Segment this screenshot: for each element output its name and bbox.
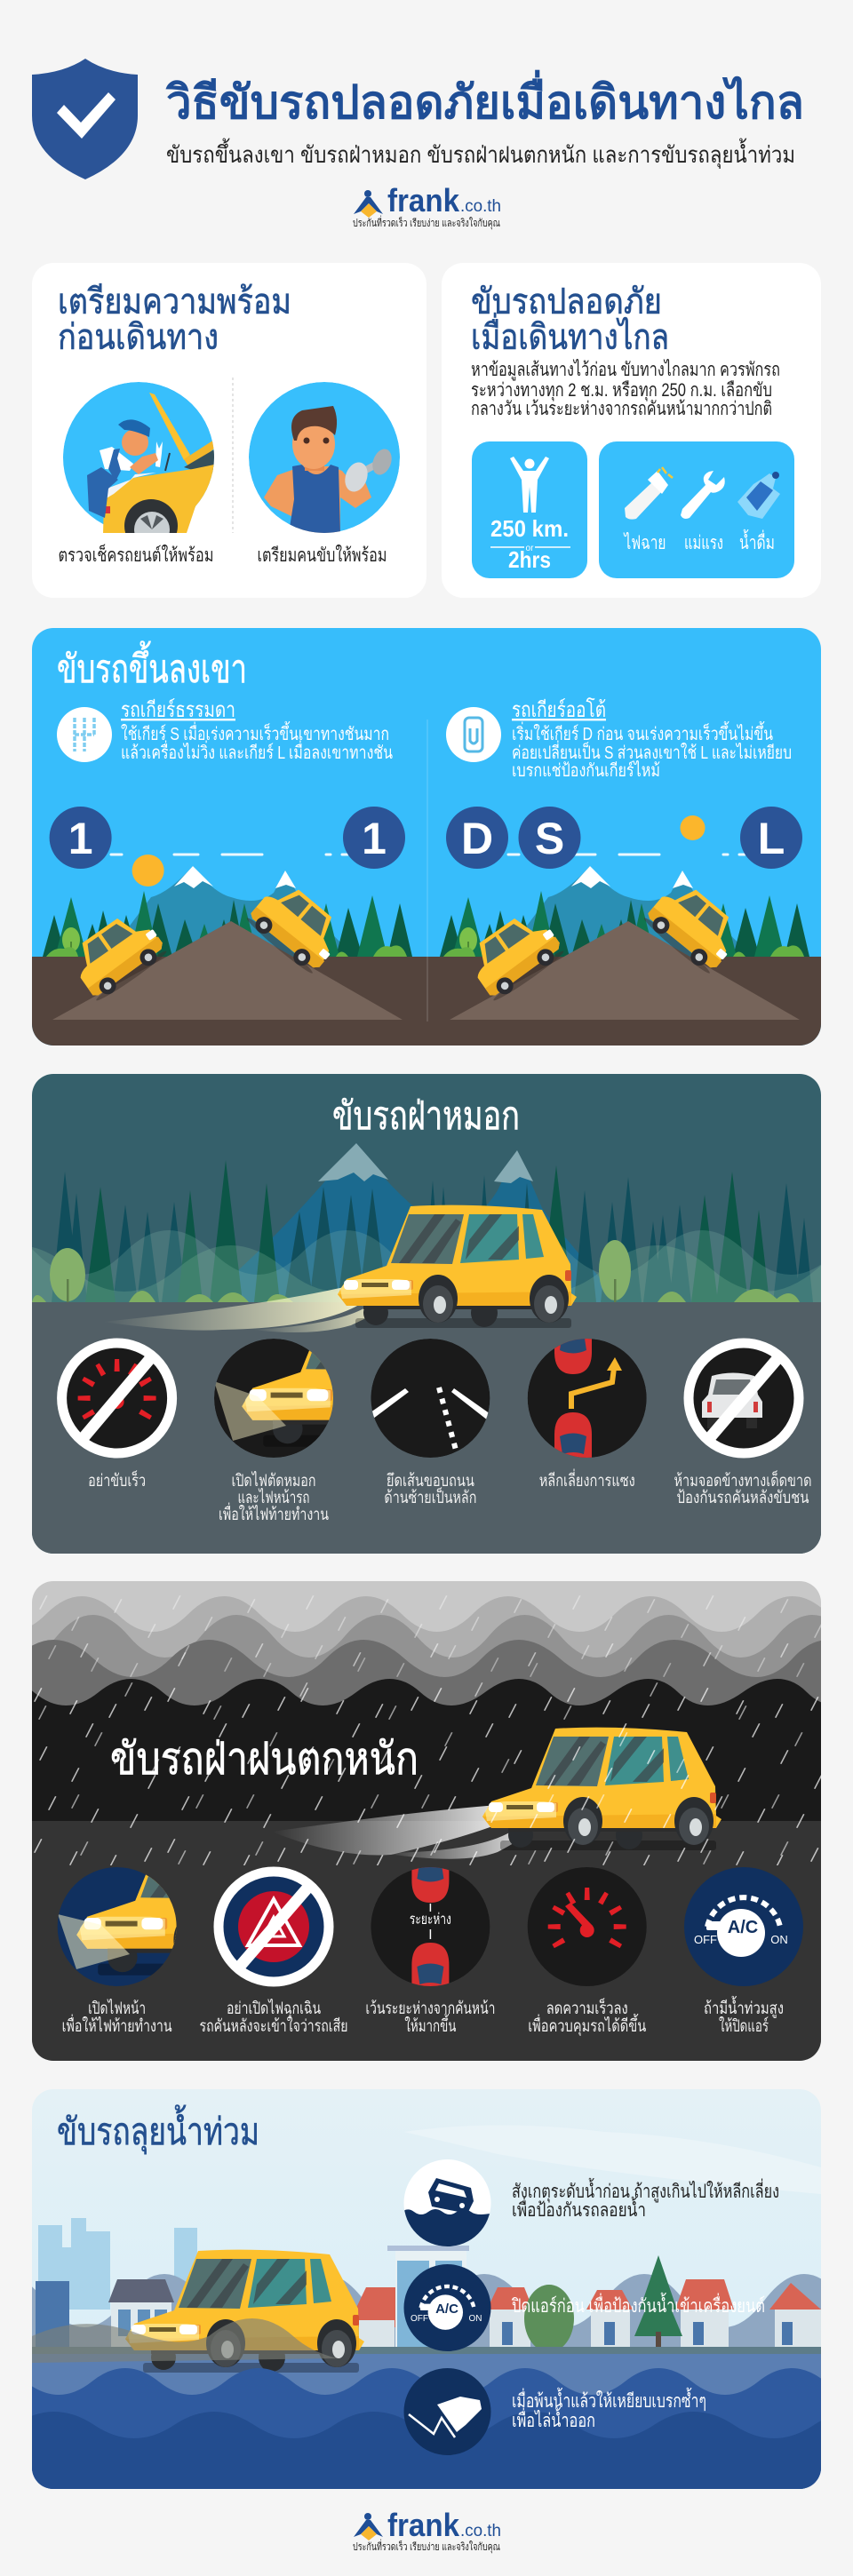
headlight beams (272, 1805, 533, 1859)
text: check water level (512, 2178, 779, 2221)
label: follow road edge (385, 1472, 476, 1503)
scene: city skyline (38, 2218, 197, 2310)
scene: houses (36, 2279, 821, 2352)
panel: driving in heavy rain (0, 1581, 853, 2061)
panel: driving uphill and downhill (32, 628, 821, 1046)
label: prepare driver: เตรียมคนขับให้พร้อม (258, 545, 387, 566)
icon: air conditioner off: A/C (435, 2302, 458, 2317)
icon: left sun (132, 855, 164, 886)
icon: flashlight (625, 467, 673, 520)
gear badge: S: S (535, 814, 564, 863)
text: automatic transmission: เริ่มใช้เกียร์ D ก่อน จนเร่งความเร็วขึ้นไม่ขึ้น (512, 721, 773, 744)
logo: frank top: frank (387, 182, 460, 219)
divider (232, 378, 234, 533)
illustration: fit driver with dumbbell (249, 382, 400, 533)
car (338, 1205, 577, 1328)
panel: safe driving long distance (442, 263, 821, 598)
icon: automatic shifter (446, 707, 501, 762)
ground (32, 1821, 821, 2061)
gear badge: L (740, 807, 802, 869)
logo: frank bottom (353, 2507, 501, 2554)
icon: no roadside stopping (689, 1343, 799, 1453)
scene: hills (0, 2274, 853, 2363)
gear badge: L: L (758, 814, 785, 863)
logo: frank bottom: ประกันที่รวดเร็ว เรียบง่าย และจริงใจกับคุณ (353, 2539, 500, 2554)
card: rest every 250 km: or (526, 544, 534, 553)
icon: air conditioner off: OFF (411, 2314, 428, 2324)
icon: keep distance (371, 1842, 490, 2003)
scene: pine forest (52, 1160, 813, 1302)
body text: กลางวัน เว้นระยะห่างจากรถคันหน้ามากกว่าปกติ (471, 399, 772, 419)
water: first wave (0, 2368, 853, 2489)
text: pump brakes (512, 2388, 706, 2431)
heading: safe driving (471, 282, 669, 357)
icon: no hazard lights (219, 1872, 329, 1982)
scene: central building (387, 2246, 469, 2350)
card: emergency items (599, 441, 794, 578)
heading: flood: ขับรถลุยน้ำท่วม (57, 2104, 259, 2155)
icon: shield with check mark (32, 59, 138, 179)
water: translucent bump over car (32, 2318, 338, 2363)
label: avoid overtaking: หลีกเลี่ยงการแซง (539, 1468, 635, 1491)
label: no roadside stopping: ห้ามจอดข้างทางเด็ดขาด (674, 1469, 812, 1491)
label: air conditioner off: ให้ปิดแอร์ (719, 2016, 769, 2036)
label: follow road edge: ด้านซ้ายเป็นหลัก (384, 1486, 476, 1507)
text: manual transmission: แล้วเครื่องไม่วิ่ง และเกียร์ L เมื่อลงเขาทางชัน (121, 740, 393, 763)
text: pump brakes: เพื่อไล่น้ำออก (512, 2407, 595, 2431)
divider (426, 720, 428, 1022)
icon: reduce speed (528, 1867, 647, 1986)
gear badge: D (446, 807, 508, 869)
scene: trees (524, 2255, 682, 2352)
heading: safe driving: ขับรถปลอดภัย (471, 282, 662, 322)
heading: prepare: เตรียมความพร้อม (58, 282, 291, 322)
text: check water level: สังเกตุระดับน้ำก่อน ถ้าสูงเกินไปให้หลีกเลี่ยง (512, 2178, 779, 2203)
label: fog lights (219, 1471, 329, 1524)
heading: prepare: ก่อนเดินทาง (58, 318, 219, 357)
car (482, 1728, 721, 1850)
card: emergency items: ไฟฉาย (623, 532, 666, 553)
text: manual transmission: ใช้เกียร์ S เมื่อเร่งความเร็วขึ้นเขาทางชันมาก (121, 721, 389, 744)
icon: right sun (681, 815, 706, 840)
gear badge: 1 uphill: 1 (68, 814, 93, 863)
card: rest every 250 km (472, 441, 587, 578)
scene: small trees and bushes (32, 1240, 800, 1302)
label: reduce speed: ลดความเร็วลง (546, 1997, 628, 2018)
label: keep distance: เว้นระยะห่างจากคันหน้า (365, 2000, 495, 2018)
panel: driving through flood (0, 2089, 853, 2489)
label: fog lights: เปิดไฟตัดหมอก (231, 1471, 316, 1491)
scene: storm cloud layers (0, 1596, 853, 1830)
scene: fog layers (32, 1230, 821, 1302)
card: rest every 250 km: 250 km. (490, 515, 569, 542)
ground (32, 957, 821, 1046)
text: manual transmission (121, 697, 393, 763)
rain streaks: upper faint (32, 1590, 821, 1679)
icon: air conditioner off (403, 2264, 490, 2351)
card: rest every 250 km: 2hrs (508, 546, 551, 573)
gear badge: D: D (461, 814, 493, 863)
logo: frank bottom: .co.th (460, 2522, 501, 2540)
heading: heavy rain: ขับรถฝ่าฝนตกหนัก (110, 1734, 419, 1784)
text: check water level: เพื่อป้องกันรถลอยน้ำ (512, 2197, 646, 2221)
scene: left mountain road (43, 855, 412, 1020)
text: manual transmission: รถเกียร์ธรรมดา (121, 697, 235, 722)
gear badge: 1 downhill: 1 (362, 814, 387, 863)
label: no hazard lights: รถคันหลังจะเข้าใจว่ารถเสีย (199, 2016, 348, 2036)
scene: right mountain road (440, 855, 809, 1020)
logo: frank top: ประกันที่รวดเร็ว เรียบง่าย และจริงใจกับคุณ (353, 215, 500, 230)
label: headlights on: เปิดไฟหน้า (88, 1999, 146, 2018)
label: no hazard lights (199, 1999, 348, 2036)
icon: avoid overtaking (528, 1339, 647, 1458)
scene: mountains (204, 1143, 622, 1302)
logo: frank bottom: frank (387, 2507, 460, 2543)
label: keep distance: ให้มากขึ้น (404, 2014, 456, 2036)
card: emergency items: น้ำดื่ม (739, 529, 775, 553)
text: automatic transmission: เบรกแช่ป้องกันเกียร์ไหม้ (512, 760, 660, 781)
icon: keep distance: ระยะห่าง (410, 1911, 451, 1928)
label: fog lights: เพื่อให้ไฟท้ายทำงาน (219, 1502, 329, 1524)
card: emergency items: แม่แรง (684, 533, 723, 553)
label: reduce speed: เพื่อควบคุมรถได้ดีขึ้น (528, 2014, 646, 2037)
icon: air conditioner off: OFF (694, 1933, 717, 1946)
car (125, 2250, 364, 2373)
label: keep distance (365, 2000, 495, 2036)
text: turn off air conditioner: ปิดแอร์ก่อน เพื่อป้องกันน้ำเข้าเครื่องยนต์ (511, 2293, 765, 2317)
text: automatic transmission (512, 697, 792, 781)
icon: air conditioner off: ON (469, 2314, 482, 2324)
icon: foot on brake (403, 2368, 490, 2455)
icon: air conditioner off (684, 1867, 803, 1986)
gear badge: 1 downhill (343, 807, 405, 869)
logo: frank top (353, 182, 501, 230)
ground (32, 1302, 821, 1554)
label: reduce speed (528, 1997, 646, 2037)
icon: water bottle (737, 472, 780, 519)
icon: car in water (400, 2159, 498, 2252)
logo: frank top: .co.th (460, 197, 501, 216)
gear badge: 1 uphill (50, 807, 112, 869)
label: fog lights: และไฟหน้ารถ (238, 1488, 309, 1507)
heading: uphill downhill: ขับรถขึ้นลงเขา (57, 640, 247, 691)
illustration: mechanic checking car (63, 382, 214, 533)
icon: air conditioner off: ON (770, 1933, 788, 1946)
panel: prepare before the trip (32, 263, 426, 598)
label: headlights on: เพื่อให้ไฟท้ายทำงาน (62, 2014, 172, 2036)
rain streaks: lower dense (32, 1626, 821, 1865)
label: no roadside stopping (674, 1470, 810, 1503)
scene: clouds (404, 2125, 821, 2194)
icon: headlights on (58, 1828, 363, 1986)
icon: wrench (681, 471, 725, 519)
heading: prepare (58, 282, 291, 357)
label: air conditioner off: ถ้ามีน้ำท่วมสูง (704, 1996, 784, 2018)
icon: no speeding (62, 1343, 172, 1453)
road (32, 2347, 821, 2356)
icon: manual shifter (57, 707, 112, 762)
label: air conditioner off (704, 1996, 784, 2036)
body text: ระหว่างทางทุก 2 ช.ม. หรือทุก 250 ก.ม. เลือกขับ (471, 380, 772, 402)
icon: fog lights (214, 1339, 333, 1458)
icon: air conditioner off: A/C (728, 1918, 758, 1937)
label: no hazard lights: อย่าเปิดไฟฉุกเฉิน (227, 1999, 321, 2019)
text: automatic transmission: รถเกียร์ออโต้ (512, 697, 606, 722)
panel: driving through fog (0, 1074, 853, 1554)
label: headlights on (62, 1999, 172, 2036)
gear badge: S (519, 807, 581, 869)
label: no speeding: อย่าขับเร็ว (88, 1469, 146, 1491)
heading: fog: ขับรถฝ่าหมอก (332, 1094, 520, 1138)
icon: follow road edge (371, 1339, 490, 1458)
headlight beams (116, 1288, 364, 1332)
label: check the car: ตรวจเช็ครถยนต์ให้พร้อม (59, 543, 213, 566)
label: no roadside stopping: ป้องกันรถคันหลังขับชน (677, 1489, 809, 1507)
text: pump brakes: เมื่อพ้นน้ำแล้วให้เหยียบเบรกซ้ำๆ (512, 2388, 706, 2412)
body text (471, 359, 780, 419)
water: second wave (0, 2412, 853, 2489)
label: follow road edge: ยึดเส้นขอบถนน (387, 1472, 474, 1491)
title: วิธีขับรถปลอดภัยเมื่อเดินทางไกล (165, 70, 804, 129)
heading: safe driving: เมื่อเดินทางไกล (471, 313, 669, 357)
